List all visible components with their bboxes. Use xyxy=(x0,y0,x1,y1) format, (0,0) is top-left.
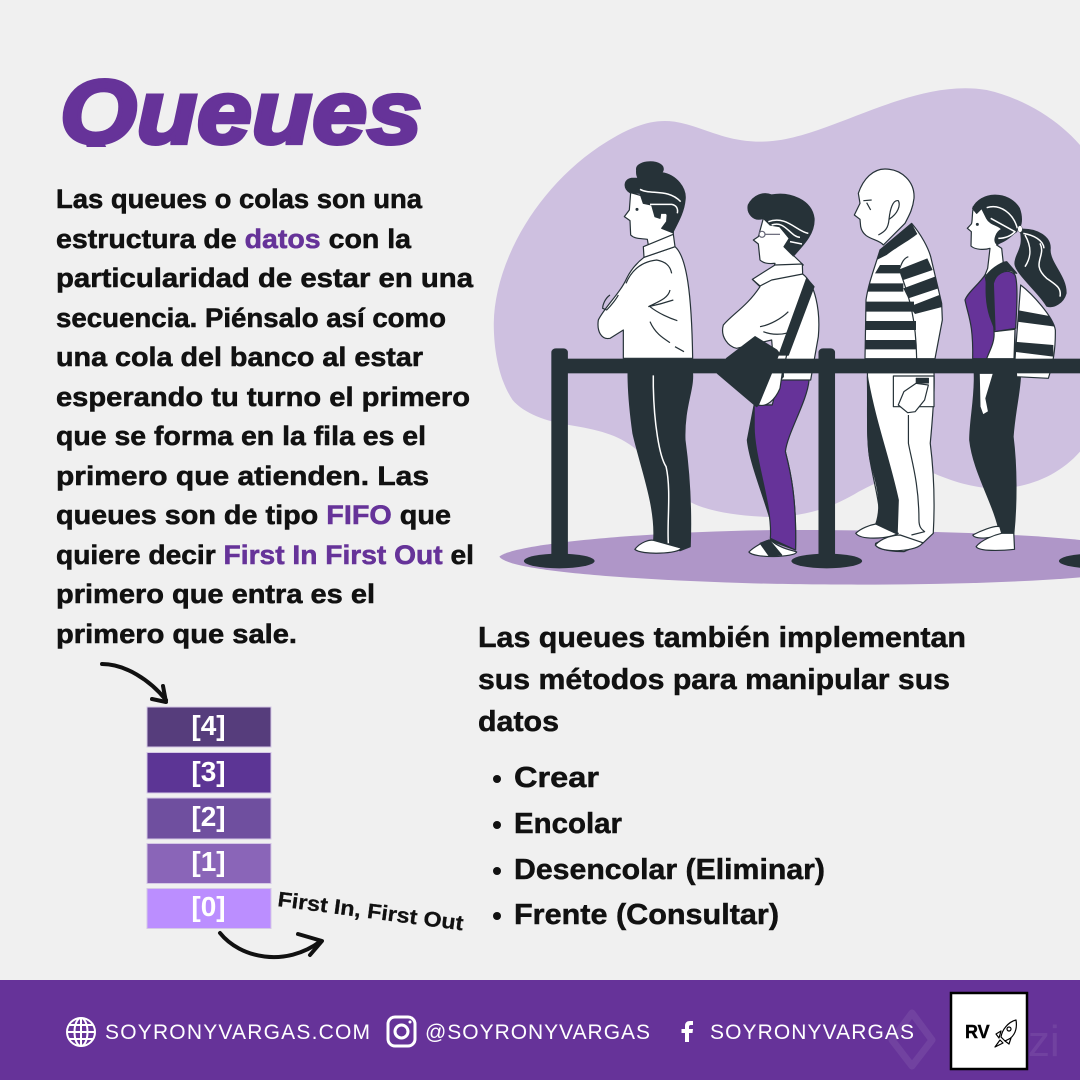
list: queue methods: Desencolar (Eliminar) xyxy=(514,854,825,886)
text block: methods intro: Las queues también implementan xyxy=(478,622,966,654)
queue stack diagram xyxy=(147,707,271,928)
instagram handle: @SOYRONYVARGAS xyxy=(425,1021,650,1044)
list: queue methods: Frente (Consultar) xyxy=(514,899,779,931)
icon: globe xyxy=(67,1018,95,1046)
person 3 upper body xyxy=(854,169,943,359)
text block: definition: estructura de datos con la xyxy=(56,224,412,254)
stack item 2 xyxy=(147,798,271,839)
arrow: into queue xyxy=(102,664,166,702)
illustration: people queuing xyxy=(494,88,1080,585)
text block: definition: esperando tu turno el primero xyxy=(56,382,470,412)
icon: instagram xyxy=(388,1017,415,1046)
list: queue methods xyxy=(493,762,825,931)
facebook handle: SOYRONYVARGAS xyxy=(710,1021,914,1044)
text block: definition xyxy=(56,184,474,649)
website: SOYRONYVARGAS.COM xyxy=(105,1021,370,1044)
watermark: Platzi xyxy=(952,1017,1060,1066)
footer band xyxy=(0,980,1080,1080)
list: queue methods: Encolar xyxy=(514,808,622,840)
text block: definition: secuencia. Piénsalo así como xyxy=(56,303,446,333)
text block: definition: particularidad de estar en una xyxy=(56,263,474,293)
stanchion barrier xyxy=(524,348,1080,568)
stack item 4: [4] xyxy=(191,710,226,741)
text block: definition: Las queues o colas son una xyxy=(56,184,423,214)
person 2 legs xyxy=(747,379,809,557)
icon: rocket xyxy=(995,1020,1016,1047)
list: queue methods: Crear xyxy=(514,762,599,794)
text block: definition: quiere decir First In First Out el xyxy=(56,540,474,570)
floor ellipse xyxy=(499,530,1080,585)
stack item 3: [3] xyxy=(191,756,226,787)
text block: definition: primero que sale. xyxy=(56,619,297,649)
label: first in first out: First In, First Out xyxy=(276,888,465,935)
person 3 legs xyxy=(856,373,934,552)
stack item 2: [2] xyxy=(191,801,226,832)
logo xyxy=(951,993,1027,1069)
text block: definition: queues son de tipo FIFO que xyxy=(56,500,451,530)
watermark xyxy=(892,1013,1060,1066)
logo: RV xyxy=(965,1022,990,1042)
text block: methods intro: datos xyxy=(478,706,559,738)
text block: methods intro xyxy=(478,622,966,738)
stack item 0: [0] xyxy=(191,891,226,922)
person 2 upper body xyxy=(717,194,819,407)
background blob xyxy=(494,88,1080,517)
text block: methods intro: sus métodos para manipular sus xyxy=(478,664,950,696)
stack item 4 xyxy=(147,707,271,747)
stack item 0 xyxy=(147,888,271,928)
person 1 upper body xyxy=(598,162,693,358)
title: Queues xyxy=(60,63,422,163)
person 1 legs xyxy=(628,373,693,553)
text block: definition: primero que atienden. Las xyxy=(56,461,429,491)
text block: definition: una cola del banco al estar xyxy=(56,342,424,372)
icon: facebook xyxy=(682,1021,693,1042)
stack item 1 xyxy=(147,844,271,884)
arrow: out of queue xyxy=(220,933,322,957)
stack item 1: [1] xyxy=(191,846,226,877)
person 4 legs xyxy=(970,373,1021,550)
stack item 3 xyxy=(147,752,271,793)
text block: definition: primero que entra es el xyxy=(56,579,375,609)
text block: definition: que se forma en la fila es el xyxy=(56,421,426,451)
person 4 upper body xyxy=(965,195,1066,378)
